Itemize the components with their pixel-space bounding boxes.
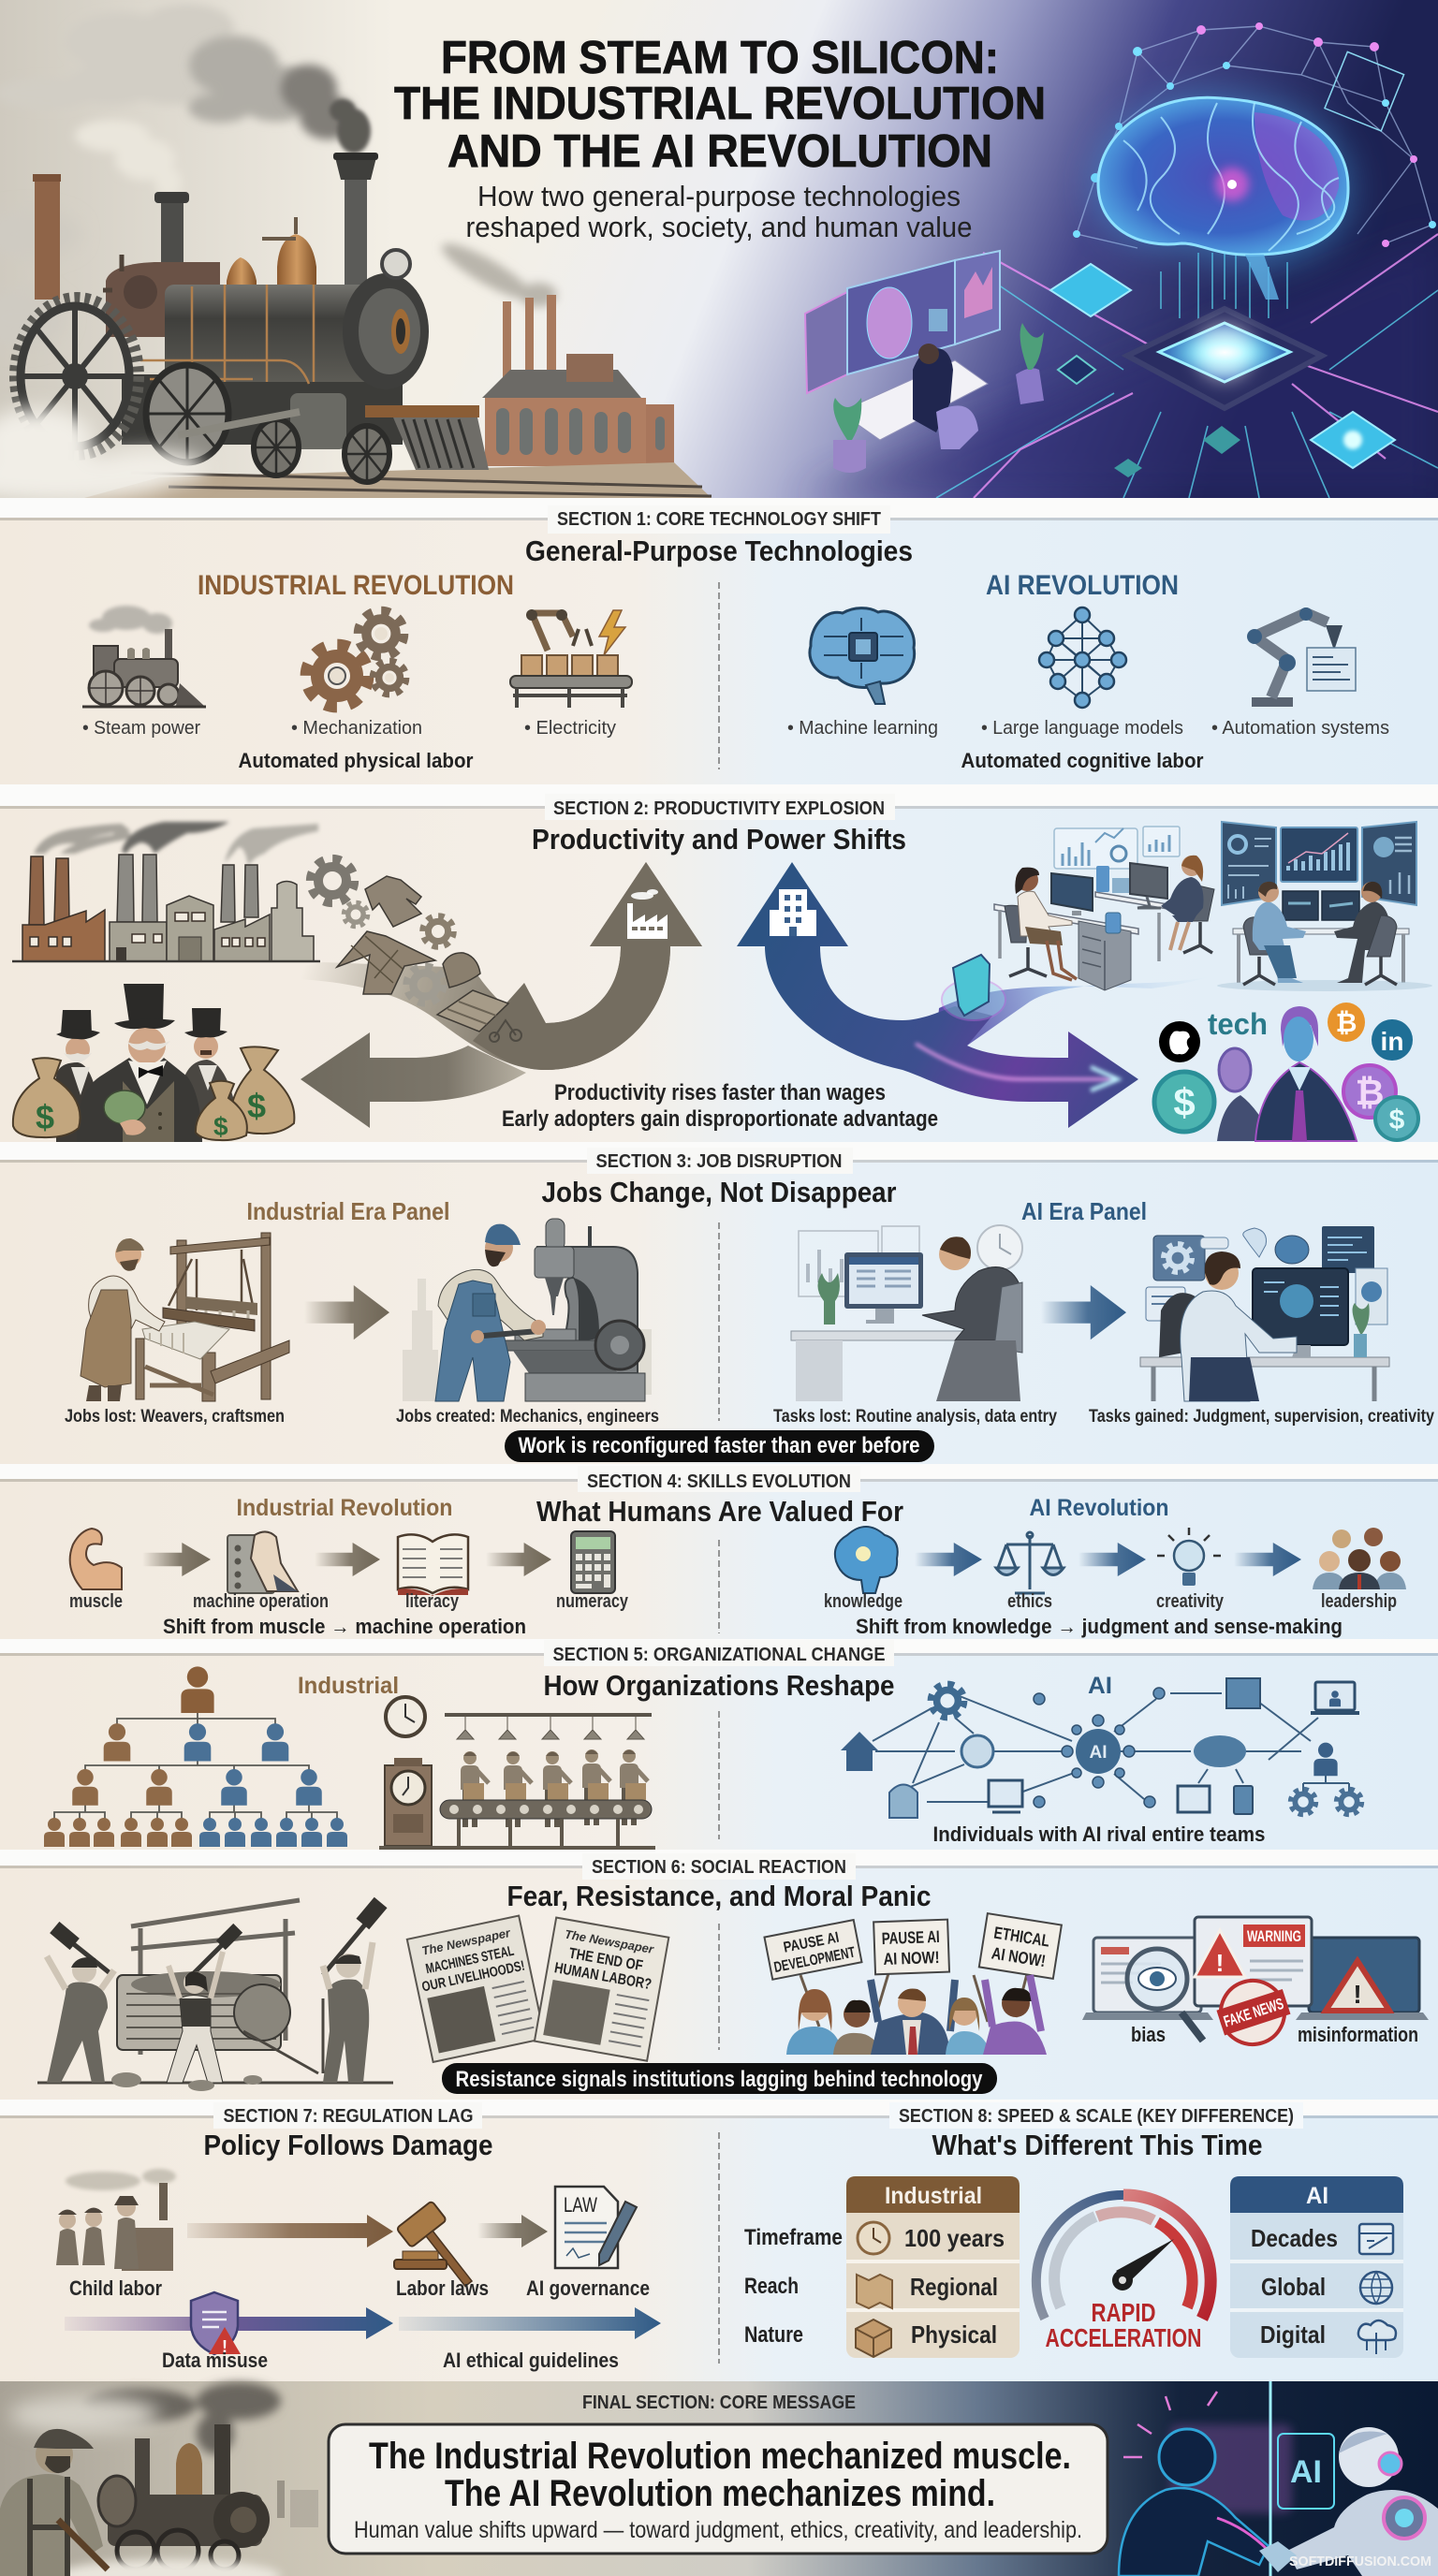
tech logos and coins: $ — [1389, 1105, 1405, 1135]
glowing brain — [1096, 96, 1350, 300]
icon: robot arm — [1247, 607, 1356, 707]
section 6 label: SECTION 6: SOCIAL REACTION — [592, 1857, 846, 1878]
gauge caption: ACCELERATION — [1045, 2323, 1202, 2352]
AI network diagram: AI — [1090, 1743, 1107, 1763]
icon: neural network — [1039, 607, 1126, 708]
industrial column — [846, 2176, 1020, 2358]
icon: machine panel — [227, 1531, 298, 1593]
sections 7 and 8 panel — [0, 2102, 1438, 2381]
callout: work reconfigured — [505, 1430, 934, 1462]
industrial subhead: Industrial — [298, 1673, 399, 1699]
section 1 panel — [0, 498, 1438, 784]
icon: gavel — [394, 2201, 486, 2298]
comparison row labels: Timeframe — [744, 2225, 843, 2250]
brown skill arrows — [142, 1543, 551, 1576]
newspapers: THE END OF — [567, 1946, 644, 1974]
section 8 heading: What's Different This Time — [932, 2129, 1262, 2161]
risk labels — [1131, 2023, 1418, 2046]
core message box: The AI Revolution mechanizes mind. — [445, 2473, 995, 2514]
hierarchy org chart — [44, 1666, 347, 1847]
icon: steam train — [82, 606, 206, 707]
final section banner — [0, 2381, 1438, 2576]
ground steam — [0, 408, 206, 500]
industrial column: Physical — [911, 2320, 997, 2349]
callout: resistance: Resistance signals institutions lagging behind technology — [455, 2067, 983, 2092]
policy labels top: Child labor — [69, 2276, 162, 2300]
policy labels bottom — [162, 2349, 619, 2372]
icon: scales — [996, 1532, 1064, 1593]
icon: gears — [307, 612, 405, 706]
protest signs: DEVELOPMENT — [772, 1945, 857, 1976]
protesters — [786, 1975, 1047, 2055]
hero subtitle — [466, 180, 972, 243]
icon: leadership group — [1313, 1528, 1406, 1589]
section 5 heading: How Organizations Reshape — [543, 1669, 895, 1702]
section 5 label: SECTION 5: ORGANIZATIONAL CHANGE — [552, 1645, 886, 1665]
comparison row labels — [744, 2225, 843, 2348]
technology labels: • Large language models — [981, 718, 1183, 739]
luddites smashing machines — [37, 1897, 393, 2091]
section 8 label: SECTION 8: SPEED & SCALE (KEY DIFFERENCE) — [899, 2106, 1294, 2127]
protest signs: AI NOW! — [990, 1943, 1047, 1970]
job labels — [65, 1407, 1434, 1427]
wall charts — [1054, 827, 1180, 869]
tech logos and coins: in — [1381, 1027, 1403, 1056]
core message box: Human value shifts upward — toward judgment, ethics, creativity, and leadership. — [354, 2517, 1082, 2543]
skill labels: leadership — [1321, 1591, 1397, 1612]
AI column: Decades — [1251, 2224, 1338, 2252]
section 5 panel — [0, 1640, 1438, 1850]
railway ground — [84, 462, 712, 498]
icon: knowledge brain — [835, 1527, 898, 1593]
section 4 panel — [0, 1466, 1438, 1639]
section 4 label: SECTION 4: SKILLS EVOLUTION — [587, 1471, 851, 1492]
risk labels: bias — [1131, 2023, 1166, 2046]
policy labels top — [69, 2276, 650, 2300]
policy labels top: Labor laws — [396, 2276, 489, 2300]
technology labels — [82, 718, 1389, 739]
policy labels top: AI governance — [526, 2276, 650, 2300]
technology labels: • Steam power — [82, 718, 200, 739]
circuit board — [796, 234, 1438, 498]
AI shift: Shift from knowledge → judgment and sense-making — [856, 1615, 1343, 1638]
callout: work reconfigured: Work is reconfigured faster than ever before — [519, 1433, 919, 1458]
industrial tycoons with money bags: $ — [247, 1087, 266, 1125]
icon: open book — [398, 1534, 468, 1596]
section 4 heading: What Humans Are Valued For — [536, 1495, 903, 1528]
AI subhead: AI — [1088, 1673, 1112, 1699]
tech logos and coins: $ — [1173, 1080, 1196, 1124]
skill labels: machine operation — [193, 1591, 329, 1612]
steam train and worker — [0, 2382, 318, 2576]
icon: calculator — [571, 1531, 615, 1593]
industrial shift: Shift from muscle → machine operation — [163, 1615, 526, 1638]
skill labels: numeracy — [556, 1591, 629, 1612]
gauge caption: RAPID — [1092, 2298, 1155, 2327]
newspapers — [407, 1916, 668, 2062]
arrow: child labor to laws — [187, 2215, 393, 2247]
assembly line — [379, 1715, 655, 1848]
comparison row labels: Reach — [744, 2274, 799, 2299]
policy labels bottom: AI ethical guidelines — [443, 2349, 619, 2372]
section 2 heading: Productivity and Power Shifts — [532, 823, 906, 856]
industrial column: Industrial — [885, 2183, 982, 2209]
section 2 message: Early adopters gain disproportionate advantage — [502, 1106, 938, 1132]
AI era heading: AI Era Panel — [1021, 1197, 1147, 1225]
job labels: Jobs created: Mechanics, engineers — [396, 1407, 659, 1427]
large dashboards — [1222, 822, 1416, 905]
watermark: SOFTDIFFUSION.COM — [1289, 2554, 1431, 2569]
neural network lines — [1073, 22, 1436, 248]
AI heading: AI REVOLUTION — [986, 570, 1179, 601]
tech logos and coins: tech — [1208, 1007, 1268, 1041]
industrial column: Regional — [910, 2273, 998, 2301]
arrow: data misuse — [65, 2307, 393, 2339]
stamp: fake news: FAKE NEWS — [1222, 1995, 1285, 2030]
section 7 label: SECTION 7: REGULATION LAG — [223, 2106, 474, 2127]
AI network diagram — [841, 1678, 1361, 1818]
blue skill arrows — [915, 1543, 1301, 1576]
job labels: Jobs lost: Weavers, craftsmen — [65, 1407, 285, 1427]
factory icon on arrow — [627, 889, 668, 939]
child labor factory scene — [56, 2169, 176, 2271]
industrial era heading: Industrial Era Panel — [247, 1197, 449, 1225]
grey productivity arrow — [281, 862, 702, 1128]
office workers and dashboards — [994, 822, 1432, 991]
core message box — [329, 2424, 1108, 2554]
blue AI arrow — [737, 862, 1226, 1128]
skill labels: literacy — [405, 1591, 460, 1612]
protest signs: ETHICAL — [992, 1924, 1051, 1951]
technology labels: • Machine learning — [787, 718, 938, 739]
comparison row labels: Nature — [744, 2322, 803, 2348]
warning laptops: ! — [1216, 1949, 1224, 1977]
AI column: AI — [1306, 2183, 1328, 2209]
protest signs — [764, 1913, 1062, 2027]
holographic tower — [942, 955, 1005, 1020]
protest signs: PAUSE AI — [881, 1927, 940, 1948]
brown arrow — [304, 1285, 389, 1339]
skill labels — [69, 1591, 1397, 1612]
hero title: THE INDUSTRIAL REVOLUTION — [394, 79, 1046, 129]
human and robot handshake: AI — [1290, 2454, 1322, 2490]
smoke clouds — [0, 4, 557, 346]
industrial tycoons with money bags: $ — [213, 1112, 228, 1141]
industrial takeaway: Automated physical labor — [238, 749, 474, 772]
hero banner — [0, 0, 1438, 500]
final label: FINAL SECTION: CORE MESSAGE — [582, 2393, 856, 2413]
blue arrow — [1041, 1285, 1126, 1339]
icon: lightbulb — [1157, 1528, 1221, 1586]
factory — [482, 295, 674, 466]
skill labels: muscle — [69, 1591, 123, 1612]
newspapers: The Newspaper — [420, 1925, 512, 1958]
icon: brain chip — [810, 608, 915, 704]
section 3 panel — [0, 1148, 1438, 1464]
icon: shield warning — [191, 2292, 241, 2356]
technology labels: • Mechanization — [291, 718, 422, 739]
section 3 heading: Jobs Change, Not Disappear — [541, 1176, 897, 1208]
skill labels: knowledge — [824, 1591, 902, 1612]
weaver at loom — [81, 1233, 289, 1401]
icon: conveyor and lightning — [510, 609, 632, 708]
warning laptops: WARNING — [1247, 1927, 1301, 1945]
AI column: Global — [1261, 2273, 1326, 2301]
factory row — [12, 822, 320, 961]
hero subtitle: How two general-purpose technologies — [477, 180, 961, 212]
newspapers: HUMAN LABOR? — [553, 1960, 653, 1993]
clock and time clock — [385, 1697, 432, 1846]
icon: law document — [555, 2187, 637, 2268]
section 6 panel — [0, 1853, 1438, 2100]
section 7 heading: Policy Follows Damage — [204, 2129, 492, 2161]
office worker with data — [791, 1225, 1022, 1401]
gauge caption — [1045, 2298, 1202, 2352]
section 1 heading: General-Purpose Technologies — [525, 534, 913, 567]
hero title — [394, 33, 1046, 177]
section 2 panel — [0, 794, 1438, 1142]
protest signs: PAUSE AI — [782, 1930, 841, 1956]
isometric desk and screens — [805, 251, 1044, 473]
technology labels: • Electricity — [524, 718, 616, 739]
AI takeaway: Individuals with AI rival entire teams — [932, 1822, 1266, 1846]
section 2 label: SECTION 2: PRODUCTIVITY EXPLOSION — [553, 798, 885, 819]
industrial tycoons with money bags — [13, 984, 294, 1142]
section 2 message: Productivity rises faster than wages — [554, 1080, 886, 1105]
icon: shield warning: ! — [222, 2337, 227, 2356]
icon: muscle — [70, 1529, 122, 1589]
industrial revolution subhead: Industrial Revolution — [236, 1495, 453, 1521]
speed gauge — [1036, 2195, 1211, 2352]
arrow: AI guidelines — [399, 2307, 661, 2339]
AI-assisted worker with icons — [1140, 1226, 1389, 1401]
human and robot handshake — [1119, 2381, 1438, 2576]
newspapers: MACHINES STEAL — [424, 1943, 516, 1977]
skill labels: ethics — [1007, 1591, 1052, 1612]
AI revolution subhead: AI Revolution — [1030, 1495, 1168, 1521]
tech logos and coins: ₿ — [1336, 1008, 1357, 1037]
section 2 message — [502, 1080, 938, 1132]
core message box: The Industrial Revolution mechanized muscle. — [369, 2436, 1071, 2477]
job labels: Tasks lost: Routine analysis, data entry — [773, 1407, 1057, 1427]
warning laptops: ! — [1353, 1980, 1362, 2009]
two women at desks — [994, 856, 1214, 990]
AI takeaway: Automated cognitive labor — [961, 749, 1204, 772]
industrial column: 100 years — [904, 2224, 1005, 2252]
pair at shared desk — [1217, 882, 1432, 991]
AI column — [1230, 2176, 1403, 2358]
section 3 label: SECTION 3: JOB DISRUPTION — [595, 1151, 843, 1172]
technology labels: • Automation systems — [1211, 718, 1389, 739]
skill labels: creativity — [1156, 1591, 1225, 1612]
section 6 heading: Fear, Resistance, and Moral Panic — [507, 1880, 931, 1912]
tech logos and coins — [1154, 1003, 1418, 1141]
section 1 label: SECTION 1: CORE TECHNOLOGY SHIFT — [557, 509, 881, 530]
newspapers: The Newspaper — [564, 1927, 655, 1956]
hero title: AND THE AI REVOLUTION — [448, 126, 992, 177]
newspapers: OUR LIVELIHOODS! — [420, 1958, 526, 1996]
policy labels bottom: Data misuse — [162, 2349, 268, 2372]
building icon on arrow — [770, 889, 816, 936]
goods stream — [311, 859, 521, 1042]
arrow: laws to governance — [477, 2215, 548, 2247]
industrial tycoons with money bags: $ — [36, 1098, 54, 1136]
locomotive — [15, 153, 489, 482]
hero title: FROM STEAM TO SILICON: — [441, 33, 999, 83]
tech logos and coins: ₿ — [1356, 1074, 1384, 1113]
mechanic at drill press — [403, 1219, 652, 1401]
AI column: Digital — [1260, 2320, 1326, 2349]
hero subtitle: reshaped work, society, and human value — [466, 211, 972, 243]
icon: law document: LAW — [564, 2193, 597, 2217]
warning laptops — [1082, 1917, 1429, 2053]
protest signs: AI NOW! — [883, 1948, 940, 1969]
stamp: fake news — [1211, 1971, 1297, 2053]
industrial heading: INDUSTRIAL REVOLUTION — [198, 570, 514, 601]
